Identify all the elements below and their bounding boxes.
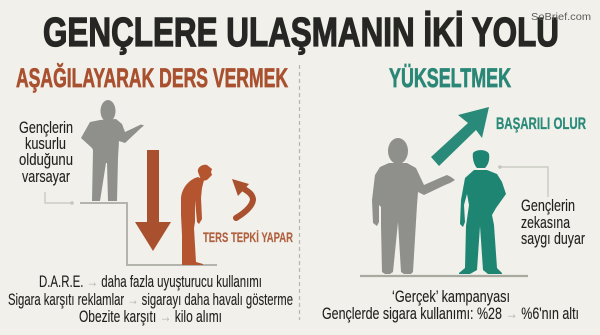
figure: pointing adult — [81, 100, 144, 201]
heading: right: YÜKSELTMEK — [389, 63, 511, 93]
watermark: SoBrief.com — [531, 11, 591, 23]
right example: ‘Gerçek’ kampanyası — [392, 287, 510, 306]
left examples: Sigara karşıtı reklamlar → sigarayı daha havalı gösterme — [8, 290, 293, 309]
left label: kusurlu — [25, 134, 66, 153]
arrow: up — [431, 107, 489, 166]
left examples: Obezite karşıtı → kilo alımı — [79, 307, 222, 326]
left examples: D.A.R.E. → daha fazla uyuşturucu kullanımı — [39, 272, 262, 291]
right example — [322, 287, 579, 323]
label leader: right — [498, 165, 548, 197]
left label: varsayar — [22, 167, 70, 186]
left examples — [8, 272, 293, 326]
arrow: backfire — [232, 179, 253, 218]
right label: zekasına — [521, 213, 570, 232]
figure: bowed teen — [181, 165, 212, 265]
right label — [521, 196, 585, 248]
left label: olduğunu — [19, 150, 73, 169]
heading: left: AŞAĞILAYARAK DERS VERMEK — [16, 62, 288, 93]
left label — [19, 118, 73, 186]
right example: Gençlerde sigara kullanımı: %28 → %6'nın altı — [322, 304, 579, 323]
ground — [360, 275, 528, 277]
label: backfires: TERS TEPKİ YAPAR — [203, 229, 293, 245]
right label: Gençlerin — [521, 196, 575, 215]
left label: Gençlerin — [19, 118, 73, 137]
figure: adult — [372, 138, 455, 274]
label leader: left — [45, 192, 74, 205]
steps — [80, 203, 217, 265]
figure: teen — [459, 150, 506, 274]
arrow: down — [135, 150, 171, 251]
